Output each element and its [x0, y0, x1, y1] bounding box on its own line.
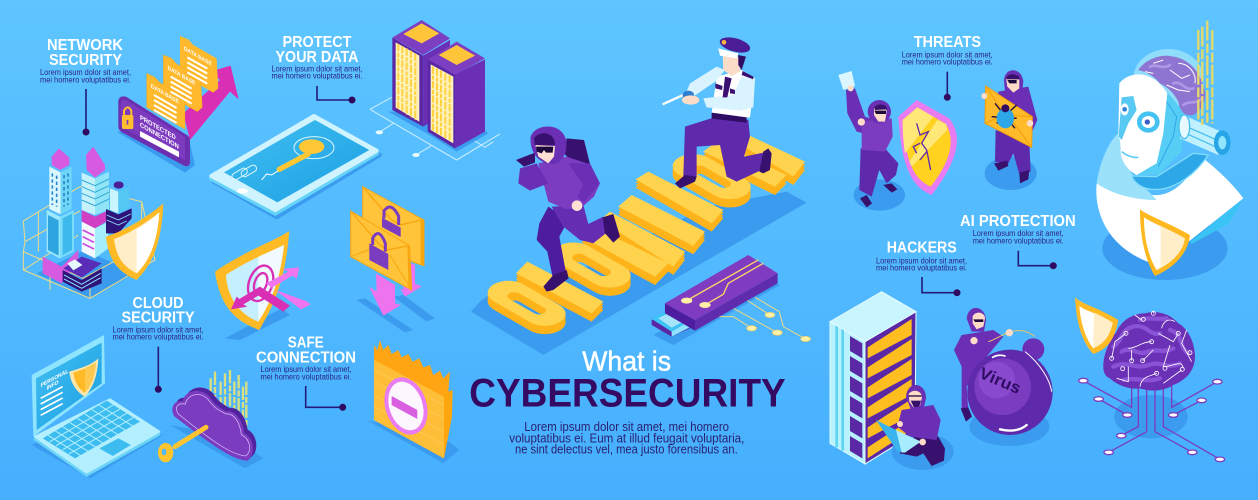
torso: [897, 405, 941, 440]
icon: bug: [992, 103, 1017, 128]
label: threats: [902, 34, 993, 67]
tower: small building: [106, 181, 132, 233]
character: hacker with hammer: [838, 71, 905, 211]
illustration: envelopes with locks and arrows: [351, 187, 435, 332]
stop sign: [377, 372, 435, 440]
dark leg: [537, 207, 568, 277]
label: cloud security: mei homero voluptatibus ei.: [112, 332, 204, 341]
icon: arrows: [231, 267, 311, 312]
shirt: [685, 67, 755, 123]
gun and hands: [663, 91, 699, 105]
torso: [538, 157, 600, 209]
pointer: protect your data: [317, 86, 356, 104]
label: ai protection: AI PROTECTION: [960, 213, 1076, 230]
label: hackers: [876, 240, 967, 273]
tower: middle skyscraper: [82, 147, 109, 258]
icon: shield: [1140, 209, 1190, 276]
badge: protected connection: CONNECTION: [140, 122, 179, 151]
icon: back envelope: [363, 187, 424, 266]
pointer: cloud security: [155, 347, 162, 393]
bust: [1096, 133, 1243, 263]
illustration: firewall with stop sign: [367, 340, 459, 463]
hood: [967, 308, 986, 332]
laptop: [876, 420, 926, 453]
traces: [718, 297, 806, 339]
legs: [859, 148, 898, 197]
character: running thief: [516, 126, 620, 292]
label: network security: Lorem ipsum dolor sit amet,: [40, 68, 131, 77]
label: ai protection: mei homero voluptatibus ei.: [973, 236, 1064, 245]
label: protect your data: mei homero voluptatibus ei.: [272, 72, 362, 81]
icon: cracked shield: [898, 100, 957, 195]
head and cap: [718, 35, 752, 76]
label: cloud security: [112, 295, 204, 341]
legs: [898, 437, 945, 466]
illustration: tablet with key: [211, 116, 380, 217]
label: network security: NETWORK: [47, 37, 124, 54]
icon: data base folders: DATA BASE: [168, 65, 196, 87]
tower two: [428, 42, 485, 148]
pointer: ai protection: [1018, 251, 1057, 269]
circuit traces: [1083, 381, 1220, 459]
usb body: [665, 255, 778, 331]
label: safe connection: CONNECTION: [256, 350, 356, 367]
illustration: shield with target and arrows: [215, 231, 311, 340]
label: threats: THREATS: [914, 34, 981, 51]
hammer: [838, 71, 862, 120]
icon: data base folders: [147, 36, 218, 129]
title: what is cybersecurity: What is: [582, 346, 671, 377]
title: what is cybersecurity: CYBERSECURITY: [469, 372, 786, 416]
shoes: [994, 161, 1029, 183]
label: hackers: HACKERS: [887, 240, 957, 257]
illustration: server towers: [370, 20, 500, 160]
icon: data base folders: DATA BASE: [184, 46, 212, 68]
label: network security: mei homero voluptatibus ei.: [40, 76, 131, 84]
flames: [374, 340, 450, 397]
label: ai protection: [960, 213, 1076, 245]
icon: data base folders: DATA BASE: [151, 84, 179, 106]
label: ai protection: Lorem ipsum dolor sit amet,: [973, 229, 1064, 238]
illustration: AI robot head bust: [1096, 21, 1243, 280]
envelope: [985, 86, 1032, 147]
head: [1118, 74, 1185, 175]
character: police officer: [663, 35, 772, 188]
pointer: threats: [944, 72, 951, 101]
block: pink and navy buildings: [43, 250, 102, 292]
shoes: [543, 214, 620, 292]
brain with circuits: [1138, 56, 1205, 115]
label: protect your data: [272, 34, 362, 81]
title: what is cybersecurity: [469, 346, 786, 416]
label: threats: mei homero voluptatibus ei.: [902, 58, 993, 67]
hood: [868, 100, 891, 123]
label: protect your data: PROTECT: [282, 34, 352, 51]
shoes: [675, 148, 772, 188]
icon: download arrows: [369, 260, 422, 316]
label: hackers: Lorem ipsum dolor sit amet,: [876, 256, 967, 265]
hood: [1004, 70, 1023, 98]
trousers: [683, 117, 768, 182]
illustration: circuit brain with shield: [1075, 297, 1225, 462]
hood: [906, 385, 926, 412]
label: protect your data: YOUR DATA: [276, 49, 358, 66]
tablet screen: [224, 120, 369, 202]
label: safe connection: Lorem ipsum dolor sit amet,: [260, 365, 352, 374]
data stream cylinder: [1179, 21, 1231, 155]
brain: [1103, 311, 1195, 391]
label: network security: SECURITY: [49, 52, 123, 69]
pointer: hackers: [922, 277, 960, 296]
laptop screen: PERSONAL: [41, 368, 69, 389]
label: safe connection: mei homero voluptatibus ei.: [260, 372, 352, 381]
character: hacker with infected envelope: [981, 70, 1037, 190]
trace nodes: [1079, 378, 1225, 462]
tower: left skyscraper: [47, 148, 74, 258]
badge: protected connection: PROTECTED: [140, 114, 176, 142]
illustration: server rack: [830, 292, 916, 464]
text block: intro paragraph: Lorem ipsum dolor sit amet, mei homero: [524, 419, 729, 434]
icon: golden key: [262, 139, 324, 180]
label: cloud security: SECURITY: [122, 310, 195, 327]
fuse: [970, 329, 1035, 344]
torso: [862, 118, 893, 152]
character: hacker with laptop: [876, 385, 954, 470]
label: cloud security: Lorem ipsum dolor sit amet,: [112, 325, 204, 334]
pointer: network security: [82, 89, 90, 136]
label: network security: [40, 37, 131, 84]
icon: cloud: [172, 388, 256, 461]
icon: target rings: [243, 262, 278, 305]
icon: shield: [106, 203, 163, 280]
backpack: [564, 138, 590, 167]
icon: key: [158, 427, 206, 462]
hood and face: [531, 126, 566, 164]
pointer: safe connection: [306, 386, 346, 411]
label: hackers: mei homero voluptatibus ei.: [876, 264, 967, 273]
illustration: cloud with key: [158, 370, 263, 468]
laptop screen: INFO: [47, 379, 59, 392]
label: protect your data: Lorem ipsum dolor sit amet,: [272, 65, 362, 74]
icon: front envelope: [351, 211, 412, 290]
icon: shield: [1075, 297, 1118, 354]
arms: [516, 153, 600, 211]
usb connector: [652, 308, 690, 337]
illustration: database folders and protected connection badge: [117, 36, 239, 173]
shoes: [860, 183, 897, 207]
tower one: [392, 20, 450, 127]
rack drawers: [850, 319, 912, 458]
text block: intro paragraph: voluptatibus ei. Eum at illud feugait voluptaria,: [509, 430, 744, 445]
bomb label: Virus: [976, 363, 1024, 398]
label: cloud security: CLOUD: [132, 295, 184, 312]
legs: [995, 130, 1031, 174]
label: safe connection: SAFE: [288, 334, 324, 351]
illustration: laptop with personal info: [32, 335, 163, 478]
label: threats: Lorem ipsum dolor sit amet,: [902, 50, 993, 59]
text block: intro paragraph: ne sint delectus vel, mea justo forensibus an.: [515, 442, 738, 457]
badge: protected connection: [118, 96, 190, 166]
front leg: [552, 205, 610, 243]
illustration: usb flash drive with circuit traces: [652, 255, 811, 345]
body: [954, 330, 1003, 410]
text block: intro paragraph: [509, 419, 744, 457]
character: hacker with virus bomb: [954, 308, 1053, 446]
arm: [846, 88, 875, 135]
illustration: city with shield: [23, 147, 163, 298]
torso: [995, 87, 1037, 137]
data bars: [211, 370, 246, 430]
illustration: binary digits platform: [471, 135, 807, 355]
keyboard: [43, 401, 140, 458]
laptop screen: [32, 335, 105, 437]
icon: magenta arrow: [183, 66, 239, 140]
brain dome: [1133, 49, 1203, 108]
label: safe connection: [256, 334, 356, 381]
